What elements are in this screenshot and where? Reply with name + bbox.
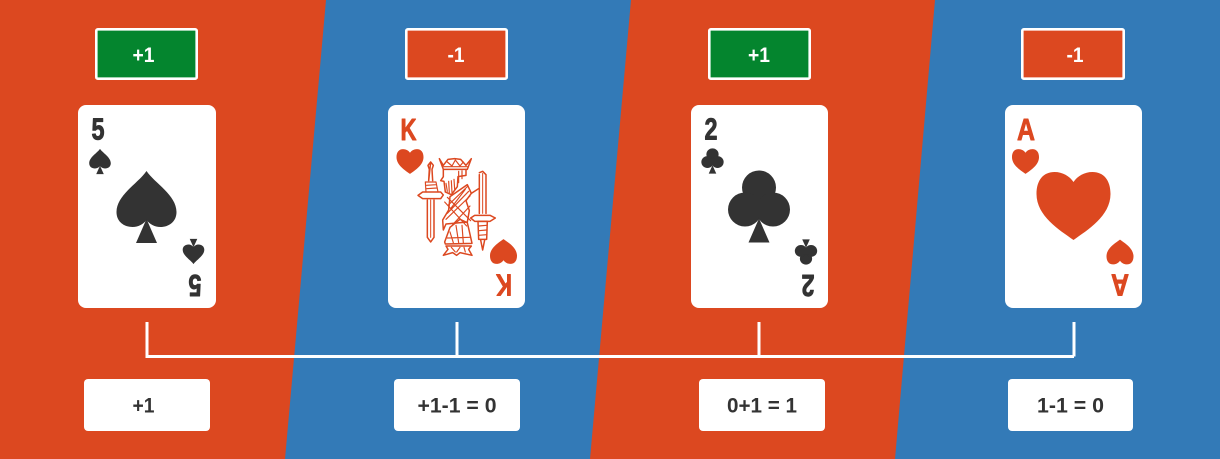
card: two of clubs: 2 xyxy=(704,112,718,146)
badge: +1 for two of clubs: +1 xyxy=(748,44,770,67)
badge: +1 for five of spades xyxy=(96,29,197,79)
face and beard xyxy=(441,169,466,195)
band: orange left xyxy=(0,0,326,459)
running count: +1: +1 xyxy=(132,394,155,418)
card: five of spades xyxy=(78,105,216,308)
card: king of hearts xyxy=(388,105,525,308)
robe xyxy=(443,185,471,230)
badge: -1 for king of hearts xyxy=(406,29,507,79)
connector bracket xyxy=(147,322,1074,356)
card: ace of hearts: A xyxy=(1111,268,1129,302)
right sword xyxy=(479,171,486,213)
card: ace of hearts: A xyxy=(1017,112,1035,147)
card: ace of hearts xyxy=(1005,105,1142,308)
running count: +1-1 = 0: +1-1 = 0 xyxy=(418,394,496,418)
badge: +1 for five of spades: +1 xyxy=(132,44,155,67)
badge: -1 for ace of hearts: -1 xyxy=(1066,44,1084,67)
lower body and base xyxy=(445,219,472,244)
card: king of hearts: K xyxy=(496,268,512,302)
running count: +1-1 = 0 xyxy=(394,379,520,431)
left sword xyxy=(428,162,433,181)
band: orange middle xyxy=(590,0,935,459)
running count: 1-1 = 0: 1-1 = 0 xyxy=(1037,394,1104,418)
running count: +1 xyxy=(84,379,210,431)
running count: 0+1 = 1: 0+1 = 1 xyxy=(727,394,797,418)
badge: -1 for king of hearts: -1 xyxy=(448,44,465,67)
card: two of clubs xyxy=(691,105,828,308)
badge: -1 for ace of hearts xyxy=(1022,29,1124,79)
card: five of spades: 5 xyxy=(188,268,202,303)
card: two of clubs: 2 xyxy=(802,268,814,303)
running count: 0+1 = 1 xyxy=(699,379,825,431)
running count: 1-1 = 0 xyxy=(1008,379,1133,431)
icon: king figure with swords xyxy=(418,159,495,255)
card: five of spades: 5 xyxy=(92,112,104,146)
badge: +1 for two of clubs xyxy=(709,29,810,79)
card: king of hearts: K xyxy=(400,112,417,147)
crown xyxy=(439,159,471,169)
